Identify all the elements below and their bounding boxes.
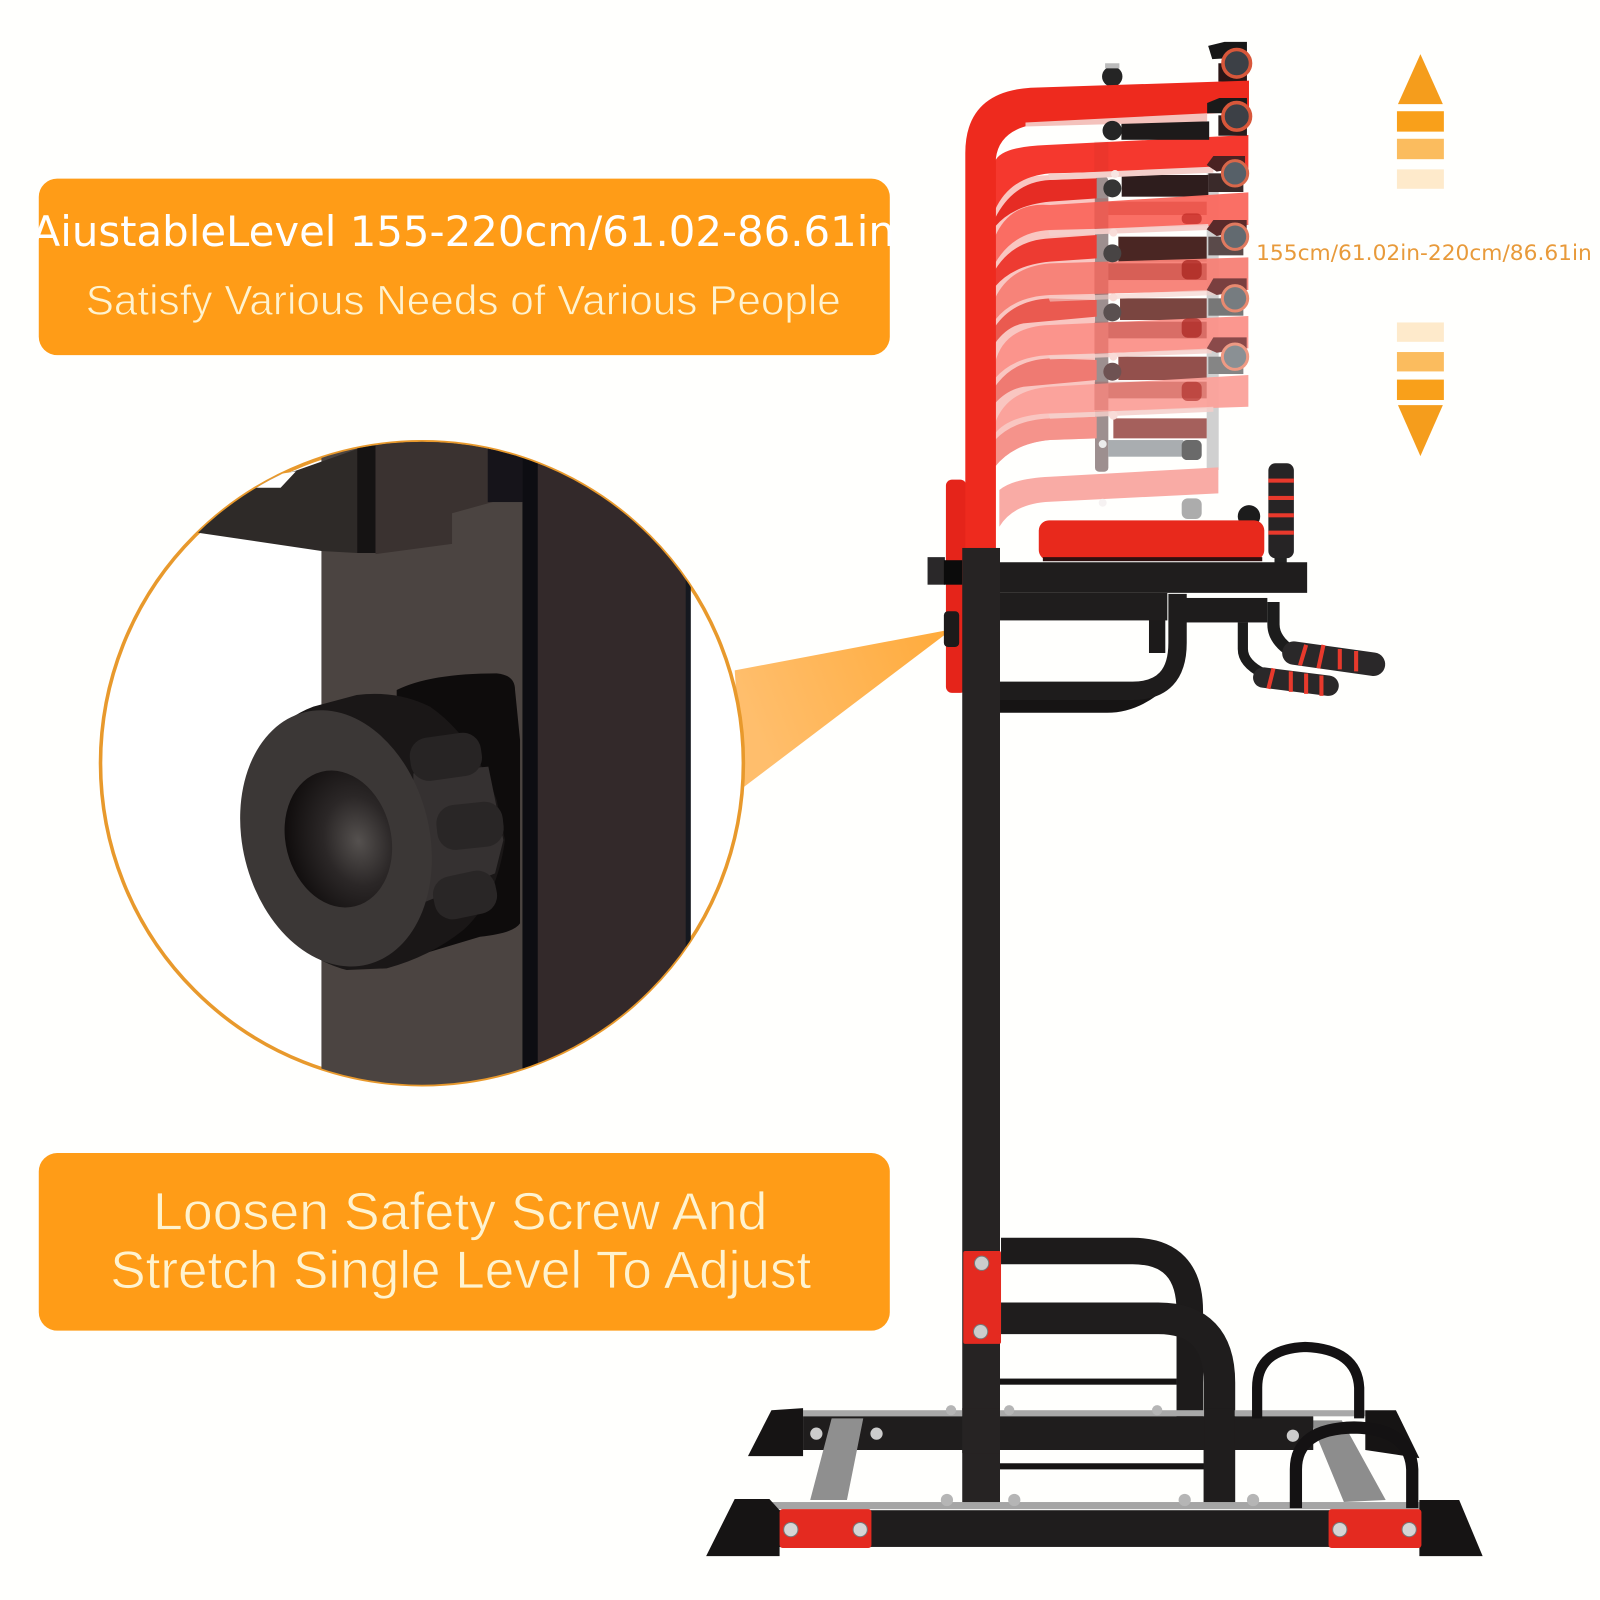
knob backing plate: [397, 673, 520, 957]
level 3 under band: [995, 235, 1097, 287]
red post plate with bolts: [963, 1251, 1001, 1344]
panel: loosen safety screw instruction: [39, 1153, 890, 1331]
arrow: down: [1397, 322, 1444, 456]
level 6 under band: [995, 417, 1097, 467]
level 5 under band: [995, 358, 1097, 403]
translucent plates: [1048, 167, 1217, 419]
vertical overlap shadows on bands: [1094, 142, 1207, 410]
knob body: [294, 694, 505, 970]
rear U-handle: [1257, 1347, 1359, 1418]
adjustment knobs on levels: [1207, 156, 1248, 374]
level 1 plate and bracket: [1026, 98, 1251, 140]
knob centre recess: [284, 770, 392, 908]
level bolts: [1099, 170, 1121, 507]
translucent backdrop between bands: [995, 175, 1097, 467]
post front face: [321, 439, 526, 1092]
base bolts: [941, 1405, 1259, 1506]
callout pointer wedge: [735, 631, 945, 788]
level 7 band: [999, 467, 1218, 527]
upper bracket: [184, 449, 357, 553]
level 6 band: [995, 375, 1248, 433]
level 2 band: [995, 135, 1248, 210]
instruction line 2: Stretch Single Level To Adjust: [110, 1241, 811, 1300]
base: rear bar: [748, 1408, 1419, 1502]
top knobs: [1102, 42, 1251, 87]
magnified circle: safety knob detail: [101, 439, 743, 1092]
upright grip: [1268, 463, 1294, 566]
level 2 under band: [995, 178, 1097, 227]
level 4 under band: [995, 298, 1097, 343]
faded height levels: [995, 135, 1248, 527]
panel: adjustable level heading: [32, 179, 895, 355]
knob grips: [413, 767, 503, 907]
lower dip bars: [1000, 1251, 1219, 1508]
level brackets and shadow plates: [1095, 173, 1219, 519]
knob face: [240, 710, 426, 966]
seat pad: [1039, 505, 1264, 561]
arrow: up: [1397, 54, 1444, 189]
dip handles with tubes and grips: [1243, 602, 1373, 696]
level 5 band: [995, 316, 1248, 378]
subheading: satisfy needs: Satisfy Various Needs of Various People: [86, 276, 841, 323]
level 3 band: [995, 192, 1248, 263]
post side face: [537, 439, 690, 1092]
level 1: full-colour back pad: [965, 81, 1249, 548]
base: front bar, feet and red plates: [706, 1499, 1483, 1556]
frame: main post and arms: [928, 548, 1307, 1508]
heading: adjustable level range: AiustableLevel 155-220cm/61.02-86.61in: [32, 207, 895, 256]
front U-handle: [1296, 1428, 1412, 1508]
level 4 band: [995, 257, 1248, 320]
instruction line 1: Loosen Safety Screw And: [153, 1183, 767, 1242]
height range label: 155cm/61.02in-220cm/86.61in: [1256, 241, 1592, 266]
left red cushion: [946, 480, 966, 693]
fitness tower: adjustable backrest: [946, 42, 1251, 693]
knob assembly: [240, 673, 520, 970]
